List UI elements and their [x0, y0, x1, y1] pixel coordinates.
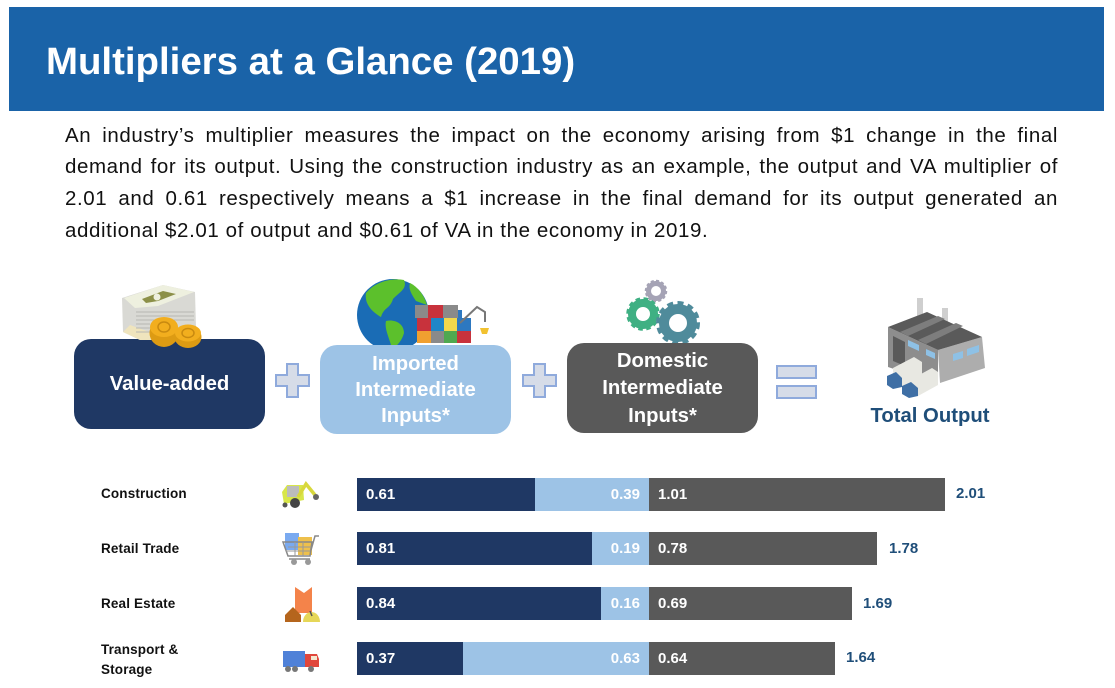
label: transport and storage: Transport &	[101, 642, 178, 657]
intro paragraph	[65, 124, 1058, 242]
label: real estate: Real Estate	[101, 596, 175, 611]
label: construction: Construction	[101, 486, 187, 501]
bar: retail trade: 0.78	[658, 540, 687, 557]
value: 1.69: 1.69	[863, 595, 892, 612]
intro paragraph: An industry’s multiplier measures the impact on the economy arising from $1 change in the final	[65, 124, 1058, 147]
label: transport and storage: Storage	[101, 662, 152, 677]
bar: construction: 0.61	[366, 486, 395, 503]
box: imported intermediate inputs: Intermediate	[355, 379, 476, 401]
value: 1.64: 1.64	[846, 649, 875, 666]
row: real estate	[101, 587, 892, 622]
box: value-added	[74, 339, 265, 429]
box: domestic intermediate inputs: Inputs*	[628, 405, 697, 427]
icon: plus	[522, 363, 557, 398]
bar: retail trade: 0.19	[611, 540, 640, 557]
label: retail trade: Retail Trade	[101, 541, 179, 556]
row: retail trade	[101, 532, 918, 565]
icon: excavator	[282, 481, 319, 508]
bar: transport and storage: 0.63	[611, 650, 640, 667]
intro paragraph: additional $2.01 of output and $0.61 of VA in the economy in 2019.	[65, 219, 708, 242]
icon: money and coins	[122, 285, 202, 348]
title: Multipliers at a Glance (2019)	[46, 40, 575, 83]
icon: equals	[776, 365, 817, 399]
bar: transport and storage: 0.37	[366, 650, 395, 667]
box: domestic intermediate inputs	[567, 343, 758, 433]
box: imported intermediate inputs: Inputs*	[381, 405, 450, 427]
row: construction	[101, 478, 985, 511]
value: 2.01: 2.01	[956, 485, 985, 502]
row: transport and storage	[101, 642, 876, 677]
bar: transport and storage: 0.64	[658, 650, 687, 667]
icon: globe and containers	[357, 279, 489, 345]
bar: real estate: 0.69	[658, 595, 687, 612]
title banner	[9, 7, 1104, 111]
bar: construction: 0.39	[611, 486, 640, 503]
bar: retail trade: 0.81	[366, 540, 395, 557]
bar: transport and storage	[357, 642, 835, 675]
icon: shopping cart	[282, 533, 319, 565]
box: value-added: Value-added	[110, 373, 229, 395]
box: imported intermediate inputs	[320, 345, 511, 434]
intro paragraph: demand for its output. Using the construction industry as an example, the output and VA multiplier of	[65, 155, 1058, 178]
box: imported intermediate inputs: Imported	[372, 353, 459, 375]
icon: truck	[283, 651, 319, 672]
box: domestic intermediate inputs: Intermediate	[602, 377, 723, 399]
label: transport and storage	[101, 642, 178, 677]
icon: real estate buildings	[285, 587, 320, 622]
intro paragraph: 2.01 and 0.61 respectively means a $1 increase in the final demand for its output generated an	[65, 187, 1058, 210]
bar: construction	[357, 478, 945, 511]
bar: construction: 1.01	[658, 486, 687, 503]
bar: real estate: 0.84	[366, 595, 395, 612]
bar: real estate	[357, 587, 852, 620]
icon: plus	[275, 363, 310, 398]
bar: real estate: 0.16	[611, 595, 640, 612]
value: 1.78: 1.78	[889, 540, 918, 557]
bar: retail trade	[357, 532, 877, 565]
icon: factory and trucks	[887, 298, 985, 398]
box: domestic intermediate inputs: Domestic	[617, 350, 708, 372]
icon: gears	[626, 280, 700, 343]
label: total output: Total Output	[870, 405, 990, 427]
